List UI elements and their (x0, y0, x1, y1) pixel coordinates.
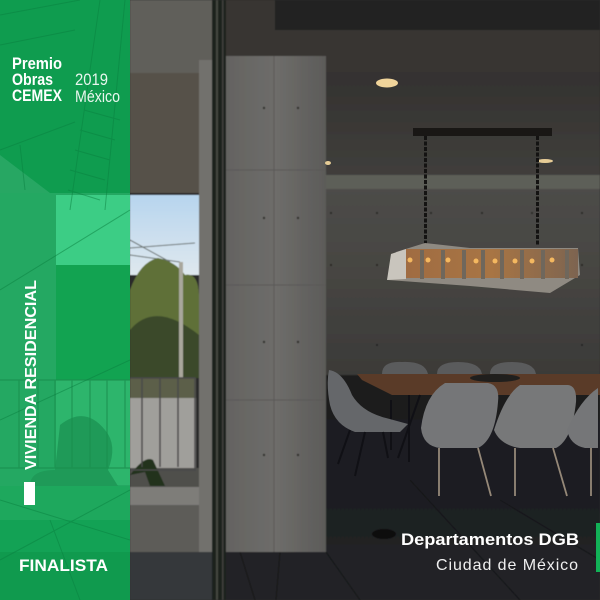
year and country (75, 70, 120, 106)
dining table and chairs (328, 362, 600, 496)
title: Premio Obras CEMEX (12, 54, 63, 105)
white marker (24, 482, 35, 505)
green overlay panel (0, 0, 130, 600)
side chair (328, 370, 408, 432)
project location: Ciudad de México (436, 557, 578, 574)
ceiling lights (325, 78, 553, 165)
chandelier (387, 128, 580, 293)
finalist label: FINALISTA (19, 557, 108, 575)
front chairs (421, 383, 498, 448)
title: Premio Obras CEMEX: CEMEX (12, 86, 63, 105)
project name: Departamentos DGB (401, 530, 579, 549)
title: Premio Obras CEMEX: Obras (12, 70, 53, 89)
category label: vivienda residencial: VIVIENDA RESIDENCIAL (23, 280, 40, 470)
year and country: 2019 (75, 70, 108, 89)
green accent bar (596, 523, 600, 572)
year and country: México (75, 87, 120, 106)
title: Premio Obras CEMEX: Premio (12, 54, 62, 73)
